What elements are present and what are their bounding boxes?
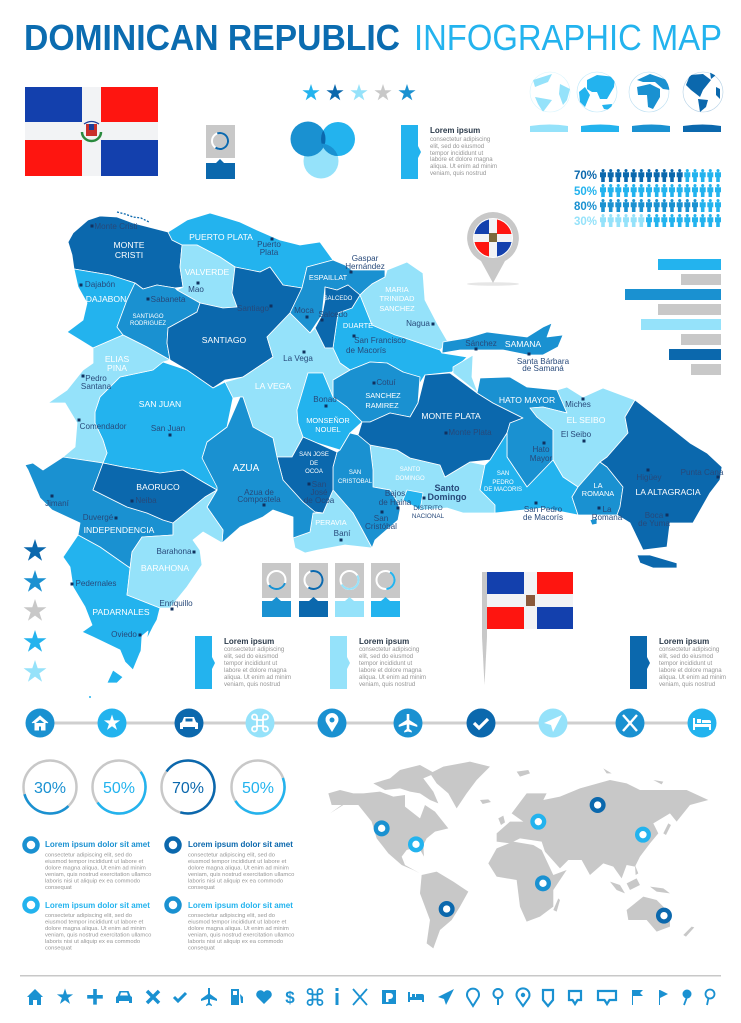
province: San Pedro de Macoris: [480, 433, 578, 515]
percentage ring 50 second: [224, 753, 292, 821]
callout: lower right: consectetur adipiscing: [659, 646, 719, 653]
city name labels: Jimaní: [45, 499, 70, 508]
province name labels: EL SEIBO: [567, 415, 606, 425]
city name labels: San Francisco: [354, 336, 406, 345]
percentage ring 70: [151, 750, 225, 824]
callout: lower left: veniam, quis nostrud: [224, 681, 280, 688]
province: Pedernales: [63, 535, 160, 670]
people percentage chart: [574, 169, 721, 228]
province name labels: VALVERDE: [185, 267, 230, 277]
province: San Cristobal: [333, 433, 400, 548]
text block 4: [166, 898, 294, 952]
text block 4: Lorem ipsum dolor sit amet: [188, 901, 293, 910]
icon: shield marker: [543, 990, 553, 1006]
small progress widget: [206, 125, 235, 179]
text block 2: laboris nisi ut aliquip ex ea commodo: [188, 878, 283, 884]
icon: pin ball: [682, 990, 692, 1005]
icon: car: [174, 708, 204, 738]
province: Monsenor Nouel: [297, 373, 362, 450]
globe stands: [530, 124, 721, 132]
city name labels: Punta Cana: [681, 468, 724, 477]
icon: fuel: [231, 989, 243, 1005]
icon: info: [336, 988, 338, 1005]
province name labels: BAORUCO: [136, 482, 180, 492]
text block 3: dolore magna aliqua. Ut enim ad minim: [45, 926, 146, 932]
icon: pin ring: [467, 989, 479, 1006]
text block 4: laboris nisi ut aliquip ex ea commodo: [188, 939, 283, 945]
province: San Juan: [95, 362, 233, 490]
icon: wide speech box: [598, 991, 616, 1004]
widget 1: [262, 563, 291, 617]
city name labels: Sánchez: [465, 339, 497, 348]
province: La Vega: [225, 313, 350, 457]
city name labels: de Yuma: [638, 519, 670, 528]
callout: lower middle: veniam, quis nostrud: [359, 681, 415, 688]
horizontal bar chart: [625, 259, 721, 375]
province name labels: SAN JOSE: [299, 452, 329, 458]
callout: lower middle: [330, 636, 426, 689]
city name labels: La Vega: [283, 354, 313, 363]
percentage ring 30: [13, 750, 87, 824]
city name labels: La: [602, 505, 612, 514]
globes: [530, 72, 723, 112]
text block 4: eiusmod tempor incididunt ut labore et: [188, 920, 287, 926]
flag of the Dominican Republic: [25, 87, 158, 176]
city name labels: Domingo: [428, 492, 467, 502]
text block 2: [166, 838, 294, 891]
province name labels: SAN: [497, 471, 509, 477]
icon: magnifier: [706, 990, 714, 1005]
text block 1: eiusmod tempor incididunt ut labore et: [45, 859, 144, 865]
province: Distrito Nacional: [403, 490, 423, 510]
callout: lower right: elit, sed do eiusmod: [659, 653, 713, 660]
city name labels: de Macorís: [346, 346, 386, 355]
icon: cutlery: [353, 989, 367, 1005]
location markers: [376, 799, 670, 921]
icon: check: [466, 708, 496, 738]
province: Azua: [202, 397, 323, 543]
Saona island: [637, 555, 677, 568]
people percentage chart: 30%: [574, 216, 597, 228]
city markers: [50, 224, 720, 636]
text block 3: Lorem ipsum dolor sit amet: [45, 901, 150, 910]
city name labels: Puerto: [257, 240, 281, 249]
text block 2: veniam, quis nostrud exercitation ullamco: [188, 872, 294, 878]
callout: lower left: Lorem ipsum: [224, 637, 274, 646]
province name labels: NOUEL: [315, 425, 341, 434]
city name labels: Santa Bárbara: [517, 357, 570, 366]
province name labels: SANCHEZ: [379, 304, 415, 313]
world continents: [328, 762, 708, 948]
people row 70: [600, 169, 721, 182]
text block 1: Lorem ipsum dolor sit amet: [45, 840, 150, 849]
callout: top: aliqua. Ut enim ad minim: [430, 163, 497, 170]
province: Puerto Plata: [168, 213, 333, 288]
province name labels: LA VEGA: [255, 381, 291, 391]
callout: top: tempor incididunt ut: [430, 150, 483, 157]
city name labels: Duvergé: [83, 513, 114, 522]
province name labels: RAMIREZ: [365, 401, 399, 410]
percentage ring 50: 50%: [103, 780, 135, 797]
rating stars top: [302, 84, 416, 100]
province name labels: PADARNALES: [92, 607, 150, 617]
callout: lower left: tempor incididunt ut: [224, 660, 277, 667]
province name labels: MONSEÑOR: [306, 416, 350, 425]
text block 2: consequat: [188, 885, 215, 891]
province name labels: DUARTE: [343, 321, 373, 330]
percentage ring 30: 30%: [34, 780, 66, 797]
icon: flag pennant: [659, 990, 668, 1005]
map pin with flag: [467, 212, 519, 286]
province name labels: SANTIAGO: [202, 335, 247, 345]
province name labels: ELIAS: [105, 354, 129, 364]
icon: flag waving: [632, 990, 643, 1005]
icon: speech box: [569, 991, 581, 1004]
text block 2: Lorem ipsum dolor sit amet: [188, 840, 293, 849]
icon: send: [538, 708, 568, 738]
text block 2: eiusmod tempor incididunt ut labore et: [188, 859, 287, 865]
province: Hato Mayor: [477, 377, 567, 487]
province name labels: DE: [310, 461, 318, 467]
city name labels: Mayor: [530, 454, 553, 463]
Catalina island: [590, 518, 597, 525]
city name labels: Moca: [294, 306, 314, 315]
province: San Jose de Ocoa: [277, 437, 337, 513]
province name labels: DE MACORIS: [484, 487, 522, 493]
city name labels: Bajos: [385, 489, 405, 498]
city name labels: Neiba: [135, 496, 157, 505]
province name labels: PEDRO: [492, 480, 514, 486]
province name labels: SANTIAGO: [132, 314, 164, 320]
province: Santiago: [167, 267, 302, 388]
city name labels: de Samaná: [522, 364, 564, 373]
icon: home: [27, 989, 43, 1005]
icon: check: [174, 993, 186, 1001]
city name labels: Azua de: [244, 488, 274, 497]
city name labels: de Ocoa: [304, 496, 335, 505]
callout: lower right: aliqua. Ut enim ad minim: [659, 674, 726, 681]
callout: top: Lorem ipsum: [430, 126, 480, 135]
city name labels: Santo: [434, 483, 460, 493]
icon: dollar: $: [285, 988, 295, 1007]
people percentage chart: 50%: [574, 186, 597, 198]
city name labels: Pedro: [85, 374, 107, 383]
city name labels: Santiago: [237, 304, 269, 313]
city name labels: Bonao: [313, 395, 337, 404]
callout: lower middle: consectetur adipiscing: [359, 646, 419, 653]
province name labels: PUERTO PLATA: [189, 232, 253, 242]
province name labels: ESPAILLAT: [309, 273, 348, 282]
callout: top: [401, 125, 497, 179]
city name labels: San Pedro: [524, 505, 563, 514]
province name labels: LA: [593, 481, 603, 490]
text block 3: eiusmod tempor incididunt ut labore et: [45, 920, 144, 926]
city name labels: DISTRITO: [413, 505, 443, 512]
province: Baoruco: [93, 463, 217, 523]
widget 2: [299, 563, 328, 617]
icon: car: [116, 991, 132, 1003]
people percentage chart: 80%: [574, 201, 597, 213]
province name labels: AZUA: [233, 463, 260, 474]
text block 2: consectetur adipiscing elit, sed do: [188, 852, 275, 858]
small islet: [89, 696, 91, 698]
province name labels: ROMANA: [582, 489, 614, 498]
callout: lower middle: aliqua. Ut enim ad minim: [359, 674, 426, 681]
city name labels: Enriquillo: [159, 599, 193, 608]
province name labels: TRINIDAD: [380, 294, 414, 303]
city name labels: Sabaneta: [151, 295, 186, 304]
callout: lower middle: Lorem ipsum: [359, 637, 409, 646]
province: Dajabon: [67, 269, 135, 348]
text block 4: dolore magna aliqua. Ut enim ad minim: [188, 926, 289, 932]
province: El Seibo: [530, 387, 635, 487]
text block 4: consectetur adipiscing elit, sed do: [188, 913, 275, 919]
text block 4: veniam, quis nostrud exercitation ullamco: [188, 932, 294, 938]
progress widgets row: [262, 563, 400, 617]
text block 1: consectetur adipiscing elit, sed do: [45, 852, 132, 858]
icon: cross: [147, 991, 159, 1003]
province name labels: LA ALTAGRACIA: [635, 487, 701, 497]
city name labels: Compostela: [237, 495, 281, 504]
text block 3: [24, 898, 151, 952]
bottom divider: [20, 975, 721, 976]
city name labels: NACIONAL: [412, 513, 445, 520]
province name labels: SANCHEZ: [365, 391, 401, 400]
callout: lower right: [630, 636, 726, 689]
province: Valverde: [177, 245, 237, 308]
icon: target pin: [516, 988, 530, 1006]
people row 30: [600, 214, 721, 227]
title: DOMINICAN REPUBLIC: [24, 17, 400, 58]
percentage ring 50: [82, 750, 156, 824]
callout: lower middle: tempor incididunt ut: [359, 660, 412, 667]
province name labels: MONTE: [113, 240, 145, 250]
bottom icon strip: [27, 988, 714, 1007]
icon: bed: [408, 992, 424, 1002]
province: Elias Pina: [48, 335, 170, 463]
icon: heart: [256, 990, 272, 1004]
province name labels: PINA: [107, 363, 127, 373]
callout: lower left: aliqua. Ut enim ad minim: [224, 674, 291, 681]
city name labels: Boca: [645, 511, 664, 520]
text block 3: veniam, quis nostrud exercitation ullamco: [45, 932, 151, 938]
province: Espaillat: [290, 260, 385, 333]
icon: command: [246, 708, 274, 738]
icon: cutlery: [616, 708, 644, 738]
globe: pale: [530, 72, 570, 112]
province name labels: SAN JUAN: [139, 399, 181, 409]
icon: command: [308, 989, 322, 1005]
province: Santo Domingo: [370, 445, 495, 513]
province: Samana: [442, 323, 563, 355]
city name labels: Plata: [260, 248, 279, 257]
widget 3: [335, 563, 364, 617]
world map with location markers: [328, 762, 708, 948]
city name labels: Hato: [532, 445, 550, 454]
province name labels: MARIA: [385, 285, 409, 294]
city name labels: Santana: [81, 382, 112, 391]
callout: top: elit, sed do eiusmod: [430, 143, 484, 150]
widget 4: [371, 563, 400, 617]
icon navigation timeline: [26, 708, 716, 738]
callout: lower middle: labore et dolore magna: [359, 667, 422, 674]
text block 3: consequat: [45, 946, 72, 952]
percentage ring 50 second: 50%: [242, 780, 274, 797]
city name labels: Cristóbal: [365, 522, 397, 531]
rating stars left: [24, 539, 46, 682]
province: La Romana: [572, 462, 623, 515]
province name labels: PERAVIA: [315, 518, 347, 527]
callout: lower right: veniam, quis nostrud: [659, 681, 715, 688]
city name labels: Nagua: [406, 319, 430, 328]
province name labels: INDEPENDENCIA: [84, 525, 155, 535]
icon: plane: [201, 988, 217, 1006]
city name labels: Mao: [188, 285, 204, 294]
province name labels: SALCEDO: [324, 296, 353, 302]
province name labels: CRISTI: [115, 250, 143, 260]
callout: top: labore et dolore magna: [430, 156, 493, 163]
callout: top: consectetur adipiscing: [430, 136, 490, 143]
globe: mid: [628, 72, 670, 112]
province: Monte Plata: [358, 373, 523, 477]
province name labels: CRISTOBAL: [338, 479, 373, 485]
text block 2: dolore magna aliqua. Ut enim ad minim: [188, 866, 289, 872]
people row 50: [600, 184, 721, 197]
city name labels: José: [310, 488, 328, 497]
map of the Dominican Republic provinces: [25, 213, 722, 683]
city name labels: Romana: [592, 513, 623, 522]
city name labels: Pedernales: [76, 579, 116, 588]
city name labels: Hernández: [345, 262, 385, 271]
province: Santiago Rodriguez: [117, 283, 200, 360]
city name labels: de Haina: [379, 498, 412, 507]
icon: plane: [394, 708, 422, 738]
icon: bed: [688, 708, 716, 738]
province name labels: OCOA: [305, 469, 323, 475]
province: Independencia: [25, 457, 173, 568]
province name labels: DAJABON: [86, 294, 126, 304]
province: Salcedo: [315, 285, 360, 348]
text block 1: dolore magna aliqua. Ut enim ad minim: [45, 866, 146, 872]
Beata island: [107, 670, 123, 683]
title: [24, 17, 722, 58]
text block 1: [24, 838, 151, 891]
icon: small pin: [493, 989, 502, 1005]
city name labels: San: [312, 480, 326, 489]
province name labels: BARAHONA: [141, 563, 189, 573]
city name labels: Cotuí: [376, 378, 396, 387]
province name labels: DOMINGO: [395, 476, 425, 482]
city name labels: San Juan: [151, 424, 185, 433]
callout: lower left: labore et dolore magna: [224, 667, 287, 674]
text block 3: consectetur adipiscing elit, sed do: [45, 913, 132, 919]
city name labels: Higüey: [636, 473, 663, 482]
city name labels: Monte Cristi: [94, 222, 138, 231]
city name labels: Gaspar: [352, 254, 379, 263]
globe: dark: [683, 72, 723, 112]
province: Duarte: [333, 295, 467, 383]
text block 3: laboris nisi ut aliquip ex ea commodo: [45, 939, 140, 945]
venn diagram: [290, 122, 355, 178]
callout: lower right: labore et dolore magna: [659, 667, 722, 674]
province: Monte Cristi: [68, 216, 183, 289]
callout: top: veniam, quis nostrud: [430, 170, 486, 177]
city name labels: de Macorís: [523, 513, 563, 522]
province name labels: RODRIGUEZ: [130, 321, 166, 327]
city name labels: El Seibo: [561, 430, 592, 439]
province name labels: SAMANA: [505, 339, 541, 349]
flag on pole: [482, 572, 573, 685]
icon: home: [26, 708, 54, 738]
province: Sanchez Ramirez: [333, 362, 420, 422]
province: Maria Trinidad Sanchez: [360, 262, 448, 350]
northern coastal islets: [117, 212, 149, 222]
callout: lower left: consectetur adipiscing: [224, 646, 284, 653]
city name labels: Comendador: [80, 422, 127, 431]
city name labels: [45, 222, 724, 639]
callout: lower left: [195, 636, 291, 689]
province name labels: HATO MAYOR: [499, 395, 555, 405]
icon: star: [57, 988, 73, 1004]
city name labels: Dajabón: [85, 280, 115, 289]
coast strip near Samana bay: [453, 355, 478, 393]
lagoon near Oviedo: [141, 631, 148, 652]
text block 1: consequat: [45, 885, 72, 891]
percentage ring 70: 70%: [172, 780, 204, 797]
city name labels: Monte Plata: [448, 428, 492, 437]
icon: pin: [318, 708, 346, 738]
people row 80: [600, 199, 721, 212]
city name labels: Salcedo: [318, 310, 348, 319]
callout: lower middle: elit, sed do eiusmod: [359, 653, 413, 660]
province name labels: [84, 232, 701, 617]
globe: bright: [577, 72, 617, 112]
people percentage chart: 70%: [574, 170, 597, 182]
city name labels: San: [374, 514, 388, 523]
province: Barahona: [127, 490, 223, 608]
province: La Altagracia: [600, 400, 722, 550]
icon: send: [438, 989, 454, 1005]
province: Peravia: [293, 490, 372, 553]
text block 4: consequat: [188, 946, 215, 952]
icon: parking: [382, 990, 396, 1004]
province name labels: SAN: [349, 470, 361, 476]
callout: lower left: elit, sed do eiusmod: [224, 653, 278, 660]
city name labels: Baní: [334, 529, 351, 538]
city name labels: Barahona: [156, 547, 192, 556]
province name labels: MONTE PLATA: [421, 411, 481, 421]
city name labels: Miches: [565, 400, 591, 409]
text block 1: veniam, quis nostrud exercitation ullamco: [45, 872, 151, 878]
callout: lower right: Lorem ipsum: [659, 637, 709, 646]
icon: plus: [87, 989, 103, 1005]
callout: lower right: tempor incididunt ut: [659, 660, 712, 667]
province name labels: SANTO: [400, 467, 421, 473]
icon: star: [98, 708, 126, 738]
city name labels: Oviedo: [111, 630, 137, 639]
text block 1: laboris nisi ut aliquip ex ea commodo: [45, 878, 140, 884]
